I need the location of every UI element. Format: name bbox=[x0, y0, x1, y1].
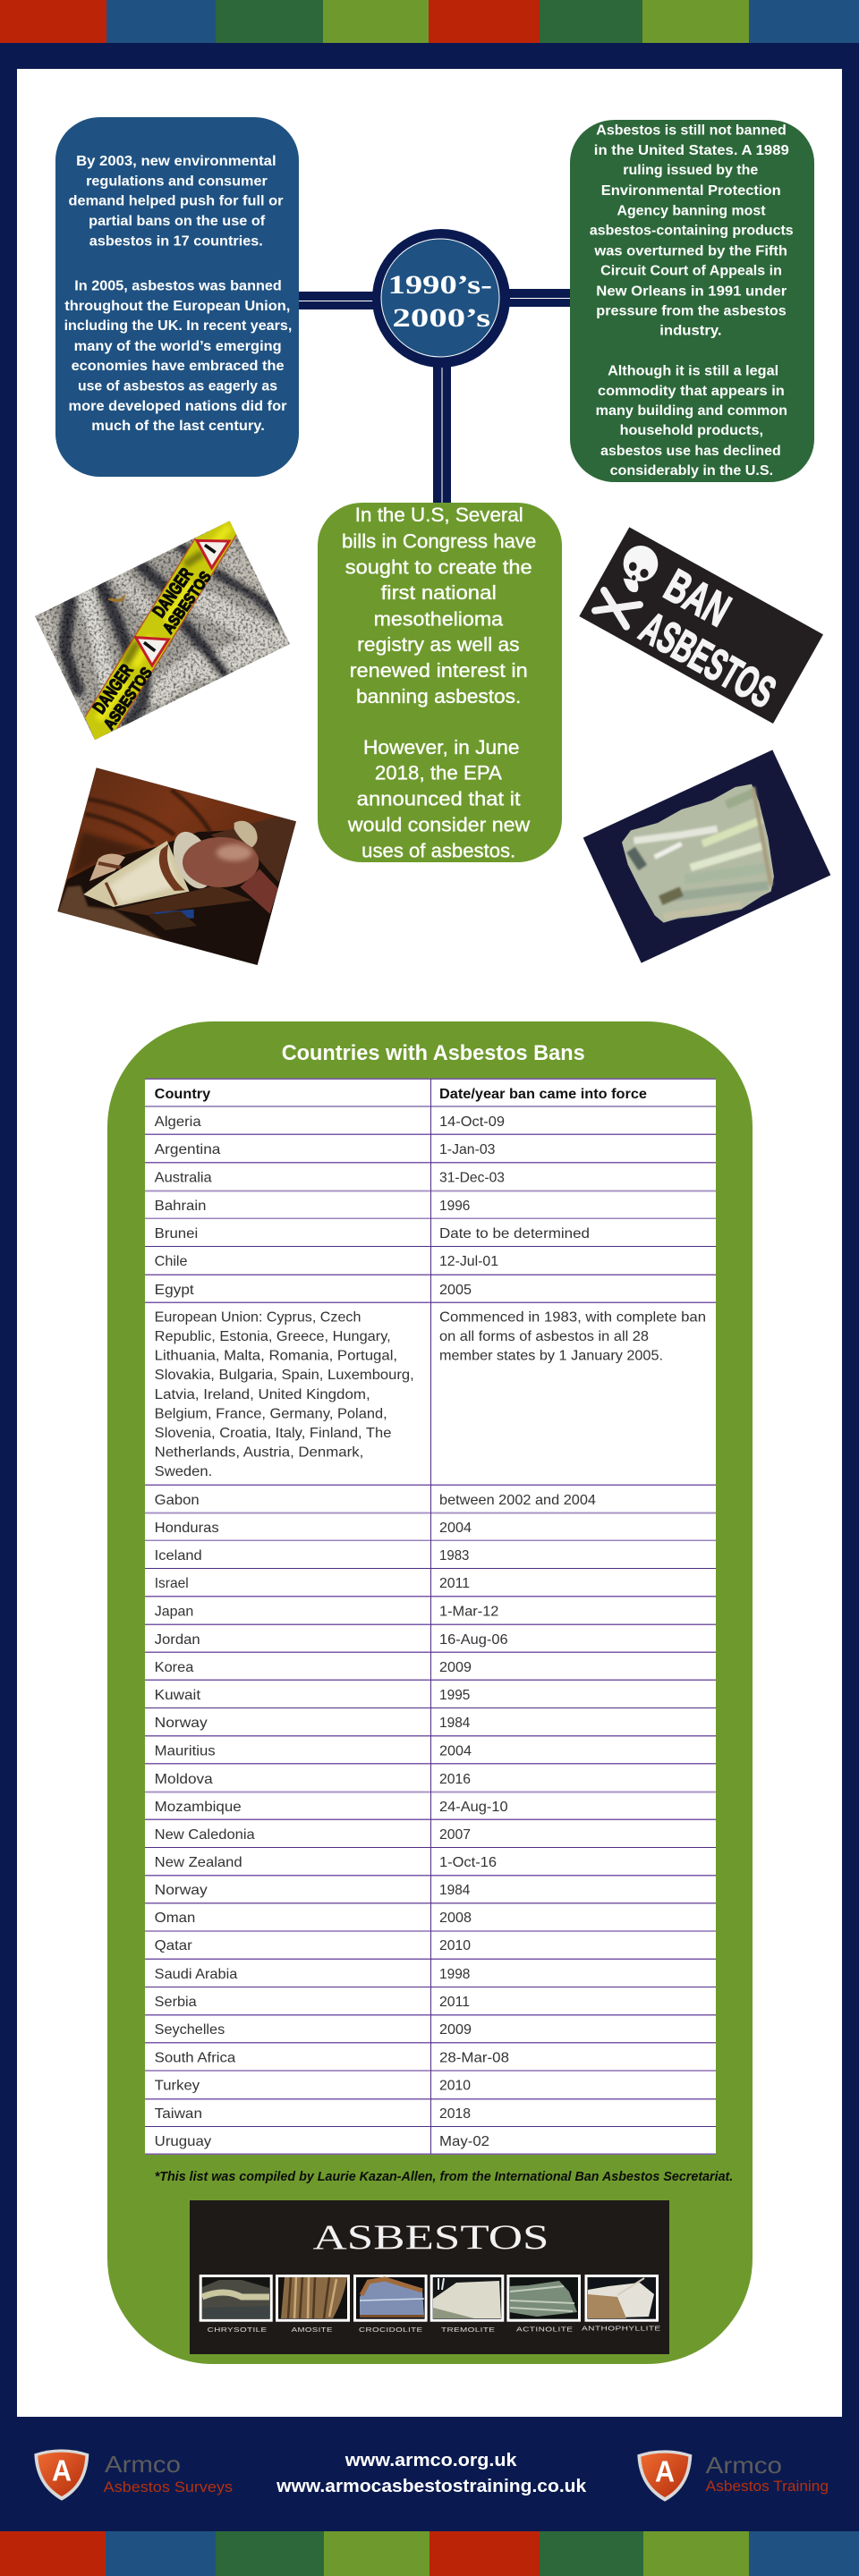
row: New Caledonia: New Caledonia bbox=[155, 1827, 255, 1843]
row: Uruguay: May-02 bbox=[439, 2134, 489, 2149]
row: Korea bbox=[155, 1660, 472, 1675]
panel: dark green text box: pressure from the asbestos bbox=[596, 304, 787, 318]
row: Uruguay: Uruguay bbox=[155, 2134, 211, 2149]
row: Norway bbox=[155, 1716, 470, 1731]
panel: blue text box: use of asbestos as eagerly as bbox=[78, 379, 277, 394]
panel: blue text box: By 2003, new environmental bbox=[76, 154, 276, 169]
row: European Union: Slovenia, Croatia, Italy, Finland, The bbox=[155, 1426, 391, 1441]
panel: dark green text box: Environmental Protection bbox=[601, 183, 781, 199]
row: Turkey: Turkey bbox=[155, 2079, 200, 2093]
row: European Union: Latvia, Ireland, United Kingdom, bbox=[155, 1387, 370, 1402]
row: Norway: Norway bbox=[155, 1716, 208, 1731]
header row bbox=[155, 1087, 647, 1102]
row: Gabon: Gabon bbox=[155, 1493, 200, 1508]
photo: ban asbestos sticker bbox=[579, 527, 823, 724]
row: South Africa bbox=[155, 2050, 509, 2066]
panel: blue text box: partial bans on the use of bbox=[89, 214, 266, 229]
row: Algeria: 14-Oct-09 bbox=[439, 1114, 505, 1130]
photo: danger asbestos tape on corrugated sheet: ASBESTOS bbox=[159, 568, 215, 637]
row: Seychelles: 2009 bbox=[439, 2022, 472, 2038]
row: Mauritius bbox=[155, 1744, 472, 1758]
photo: ban asbestos sticker: BAN bbox=[657, 559, 739, 636]
row: Qatar bbox=[155, 1938, 471, 1953]
row: Saudi Arabia bbox=[155, 1967, 470, 1982]
photo: raw asbestos chunk bbox=[583, 750, 830, 962]
row: Seychelles bbox=[155, 2022, 472, 2038]
row: Korea: Korea bbox=[155, 1660, 193, 1675]
row: Argentina bbox=[155, 1142, 496, 1157]
row: Honduras bbox=[155, 1521, 472, 1536]
panel: blue text box: throughout the European Union, bbox=[64, 299, 290, 314]
row: Jordan: 16-Aug-06 bbox=[439, 1632, 508, 1648]
panel: olive centre text box: would consider new bbox=[347, 814, 530, 835]
panel: dark green text box: Agency banning most bbox=[617, 204, 766, 218]
footer website links bbox=[276, 2451, 587, 2496]
table heading: Countries with Asbestos Bans bbox=[282, 1041, 585, 1065]
panel: olive centre text box: banning asbestos. bbox=[356, 685, 521, 708]
panel: dark green text box: asbestos-containing products bbox=[590, 224, 794, 238]
photo: danger asbestos tape on corrugated sheet bbox=[35, 521, 290, 741]
thumbnail labels: CROCIDOLITE bbox=[359, 2326, 422, 2334]
panel: dark green text box: considerably in the U.S. bbox=[610, 463, 773, 479]
panel: blue text box: regulations and consumer bbox=[86, 174, 268, 190]
header row: Country bbox=[155, 1087, 211, 1102]
row: Chile: Chile bbox=[155, 1254, 188, 1269]
row: Saudi Arabia: Saudi Arabia bbox=[155, 1967, 237, 1982]
panel: dark green text box: ruling issued by the bbox=[623, 163, 759, 178]
row: Egypt: 2005 bbox=[439, 1283, 472, 1298]
row: Oman bbox=[155, 1911, 472, 1926]
panel: olive centre text box: mesothelioma bbox=[374, 608, 504, 630]
panel: blue text box: In 2005, asbestos was banned bbox=[74, 279, 282, 293]
thumbnail: chrysotile bbox=[200, 2275, 273, 2322]
row: South Africa: 28-Mar-08 bbox=[439, 2050, 509, 2066]
row: New Caledonia bbox=[155, 1827, 471, 1843]
panel: olive centre text box: sought to create the bbox=[345, 556, 532, 578]
row: Taiwan bbox=[155, 2106, 471, 2122]
panel: olive centre text box: registry as well as bbox=[357, 633, 520, 656]
panel: dark green text box: Circuit Court of Appeals in bbox=[600, 263, 782, 279]
row: Korea: 2009 bbox=[439, 1660, 472, 1675]
row: European Union: on all forms of asbestos in all 28 bbox=[439, 1329, 649, 1344]
row: Japan: Japan bbox=[155, 1605, 193, 1619]
row: Gabon: between 2002 and 2004 bbox=[439, 1493, 596, 1508]
row: European Union: Republic, Estonia, Greece, Hungary, bbox=[155, 1329, 391, 1344]
thumbnail labels: AMOSITE bbox=[292, 2326, 333, 2334]
era badge circle bbox=[372, 229, 510, 368]
panel: olive centre text box: first national bbox=[381, 581, 497, 604]
row: Japan bbox=[155, 1605, 499, 1619]
era badge circle: 2000’s bbox=[392, 303, 490, 333]
row: Egypt bbox=[155, 1283, 472, 1298]
row: Taiwan: 2018 bbox=[439, 2106, 471, 2122]
footer website links: www.armco.org.uk bbox=[344, 2451, 517, 2470]
row: European Union: Sweden. bbox=[155, 1464, 212, 1479]
row: Gabon bbox=[155, 1493, 596, 1508]
row: Brunei: Brunei bbox=[155, 1226, 198, 1241]
photo: danger asbestos tape on corrugated sheet: DANGER bbox=[89, 661, 138, 717]
row: European Union: Netherlands, Austria, Denmark, bbox=[155, 1445, 363, 1460]
row: Serbia: Serbia bbox=[155, 1995, 197, 2010]
row: New Caledonia: 2007 bbox=[439, 1827, 471, 1843]
row: Algeria bbox=[155, 1114, 505, 1130]
thumbnail labels: ACTINOLITE bbox=[516, 2326, 573, 2333]
row: Norway (second): Norway bbox=[155, 1883, 208, 1898]
row: Australia: Australia bbox=[155, 1170, 212, 1186]
panel: dark green text box: asbestos use has declined bbox=[600, 444, 781, 459]
thumbnail: tremolite bbox=[430, 2275, 504, 2322]
panel: blue text box: economies have embraced the bbox=[72, 359, 285, 374]
row: Jordan: Jordan bbox=[155, 1632, 200, 1648]
table bbox=[145, 1079, 716, 2155]
footnote: *This list was compiled by Laurie Kazan-Allen, from the International Ban Asbestos Secretariat. bbox=[155, 2169, 733, 2184]
thumbnail labels: CHRYSOTILE bbox=[208, 2326, 267, 2334]
panel: dark green text box: commodity that appears in bbox=[598, 384, 785, 399]
asbestos types image panel: ASBESTOS bbox=[313, 2218, 549, 2257]
panel: dark green text box: in the United States. A 1989 bbox=[594, 143, 789, 158]
row: Argentina: 1-Jan-03 bbox=[439, 1142, 496, 1157]
skull bbox=[624, 546, 658, 592]
photo: lagged pipe in roof void bbox=[57, 767, 296, 965]
row: Honduras: 2004 bbox=[439, 1521, 472, 1536]
panel: olive centre text box: announced that it bbox=[357, 787, 521, 810]
row: Australia bbox=[155, 1170, 505, 1186]
row: Israel bbox=[155, 1576, 470, 1591]
panel: dark green text box: industry. bbox=[659, 324, 721, 338]
panel: dark green text box: many building and common bbox=[596, 403, 787, 419]
top colour strip bbox=[0, 0, 859, 43]
panel: blue text box: including the UK. In recent years, bbox=[64, 318, 292, 334]
header row: Date/year ban came into force bbox=[439, 1087, 647, 1102]
logo: Armco Asbestos Surveys: Asbestos Surveys bbox=[104, 2479, 233, 2496]
row: Kuwait: 1995 bbox=[439, 1688, 470, 1703]
logo: Armco Asbestos Surveys bbox=[34, 2449, 233, 2501]
logo: Armco Asbestos Training bbox=[637, 2450, 829, 2502]
row: Moldova bbox=[155, 1772, 471, 1787]
icon: shield bbox=[34, 2449, 89, 2501]
row: Seychelles: Seychelles bbox=[155, 2022, 225, 2038]
row: Kuwait: Kuwait bbox=[155, 1688, 201, 1703]
row: Brunei: Date to be determined bbox=[439, 1226, 590, 1241]
row: Egypt: Egypt bbox=[155, 1283, 194, 1298]
logo: Armco Asbestos Surveys: Armco bbox=[105, 2451, 181, 2478]
row: Oman: 2008 bbox=[439, 1911, 472, 1926]
row: Oman: Oman bbox=[155, 1911, 195, 1926]
row: Australia: 31-Dec-03 bbox=[439, 1170, 505, 1186]
row: Jordan bbox=[155, 1632, 508, 1648]
row: Israel: 2011 bbox=[439, 1576, 470, 1591]
row: Brunei bbox=[155, 1226, 590, 1241]
row: Bahrain: 1996 bbox=[439, 1199, 470, 1214]
panel: blue text box bbox=[55, 117, 299, 477]
row: Serbia bbox=[155, 1995, 470, 2010]
thumbnail: amosite bbox=[276, 2275, 350, 2322]
row: New Zealand bbox=[155, 1855, 497, 1870]
row: Iceland: 1983 bbox=[439, 1548, 469, 1563]
row: Turkey: 2010 bbox=[439, 2079, 471, 2093]
row: Kuwait bbox=[155, 1688, 470, 1703]
row: Iceland: Iceland bbox=[155, 1548, 202, 1563]
row: Turkey bbox=[155, 2079, 471, 2093]
panel: olive centre text box: 2018, the EPA bbox=[375, 762, 502, 784]
row: Norway: 1984 bbox=[439, 1716, 470, 1731]
era badge circle: 1990’s- bbox=[388, 270, 492, 300]
row: Argentina: Argentina bbox=[155, 1142, 221, 1157]
row: Saudi Arabia: 1998 bbox=[439, 1967, 470, 1982]
panel: blue text box: demand helped push for full or bbox=[68, 193, 283, 209]
panel: blue text box: asbestos in 17 countries. bbox=[89, 234, 263, 249]
row: Japan: 1-Mar-12 bbox=[439, 1605, 499, 1619]
panel: olive centre text box bbox=[318, 503, 562, 862]
row: Mauritius: 2004 bbox=[439, 1744, 472, 1758]
row: Uruguay bbox=[155, 2134, 489, 2149]
panel: olive centre text box: However, in June bbox=[363, 736, 519, 758]
row: Chile bbox=[155, 1254, 498, 1269]
asbestos types image panel bbox=[190, 2200, 669, 2354]
row: New Zealand: 1-Oct-16 bbox=[439, 1855, 497, 1870]
row: Serbia: 2011 bbox=[439, 1995, 470, 2010]
row: Moldova: Moldova bbox=[155, 1772, 213, 1787]
connector: left bbox=[299, 292, 383, 309]
row: Israel: Israel bbox=[155, 1576, 189, 1591]
panel: olive centre text box: uses of asbestos. bbox=[361, 839, 515, 862]
row: Mozambique bbox=[155, 1800, 508, 1815]
panel: olive centre text box: renewed interest in bbox=[350, 659, 528, 682]
thumbnail labels: ANTHOPHYLLITE bbox=[582, 2324, 661, 2333]
thumbnail labels bbox=[208, 2324, 661, 2334]
panel: blue text box: more developed nations did for bbox=[68, 399, 286, 414]
thumbnail: crocidolite bbox=[353, 2275, 428, 2322]
row: European Union: European Union: Cyprus, Czech bbox=[155, 1309, 361, 1326]
thumbnail labels: TREMOLITE bbox=[441, 2326, 495, 2334]
row: Mozambique: 24-Aug-10 bbox=[439, 1800, 508, 1815]
crossbones bbox=[595, 590, 640, 627]
row: Honduras: Honduras bbox=[155, 1521, 219, 1536]
panel: dark green text box: Asbestos is still not banned bbox=[596, 123, 787, 138]
panel: dark green text box: New Orleans in 1991 under bbox=[596, 284, 787, 299]
thumbnail: actinolite bbox=[506, 2275, 581, 2322]
row: Qatar: 2010 bbox=[439, 1938, 471, 1953]
row: Taiwan: Taiwan bbox=[155, 2106, 202, 2122]
row: South Africa: South Africa bbox=[155, 2050, 235, 2066]
bottom colour strip bbox=[0, 2531, 859, 2576]
logo: Armco Asbestos Training: Asbestos Training bbox=[706, 2479, 829, 2495]
thumbnail: anthophyllite bbox=[585, 2275, 659, 2322]
panel: countries with asbestos bans bbox=[107, 1021, 753, 2364]
row: Mozambique: Mozambique bbox=[155, 1800, 242, 1815]
row: Bahrain bbox=[155, 1199, 470, 1214]
row: Chile: 12-Jul-01 bbox=[439, 1254, 498, 1269]
row: Qatar: Qatar bbox=[155, 1938, 192, 1953]
row: Iceland bbox=[155, 1548, 469, 1563]
row: Moldova: 2016 bbox=[439, 1772, 471, 1787]
panel: dark green text box: Although it is still a legal bbox=[608, 363, 778, 379]
row: European Union: Lithuania, Malta, Romania, Portugal, bbox=[155, 1349, 397, 1363]
panel: olive centre text box: bills in Congress have bbox=[342, 530, 536, 553]
footer website links: www.armocasbestostraining.co.uk bbox=[276, 2477, 587, 2496]
row: European Union: Belgium, France, Germany, Poland, bbox=[155, 1406, 387, 1422]
row: European Union: member states by 1 January 2005. bbox=[439, 1349, 663, 1363]
photo: danger asbestos tape on corrugated sheet: DANGER bbox=[149, 564, 197, 622]
panel: olive centre text box: In the U.S, Several bbox=[355, 504, 523, 526]
row: Norway (second): 1984 bbox=[439, 1883, 470, 1898]
panel: dark green text box: household products, bbox=[620, 423, 763, 438]
row: New Zealand: New Zealand bbox=[155, 1855, 242, 1870]
connector: right bbox=[498, 289, 570, 307]
panel: blue text box: much of the last century. bbox=[91, 419, 265, 434]
panel: blue text box: many of the world’s emerging bbox=[74, 339, 282, 354]
row: European Union bbox=[155, 1309, 706, 1479]
icon: shield: A bbox=[655, 2456, 675, 2489]
icon: shield bbox=[637, 2450, 692, 2502]
row: Algeria: Algeria bbox=[155, 1114, 201, 1130]
photo: danger asbestos tape on corrugated sheet: ASBESTOS bbox=[100, 664, 156, 733]
row: Norway (second) bbox=[155, 1883, 470, 1898]
row: European Union: Commenced in 1983, with complete ban bbox=[439, 1309, 706, 1326]
row: European Union: Slovakia, Bulgaria, Spain, Luxembourg, bbox=[155, 1368, 414, 1383]
panel: dark green text box: was overturned by the Fifth bbox=[593, 243, 787, 259]
connector: down bbox=[433, 357, 451, 504]
logo: Armco Asbestos Training: Armco bbox=[706, 2452, 782, 2479]
panel: dark green text box bbox=[570, 120, 814, 482]
row: Bahrain: Bahrain bbox=[155, 1199, 206, 1214]
icon: shield: A bbox=[52, 2455, 72, 2488]
row: Mauritius: Mauritius bbox=[155, 1744, 216, 1758]
